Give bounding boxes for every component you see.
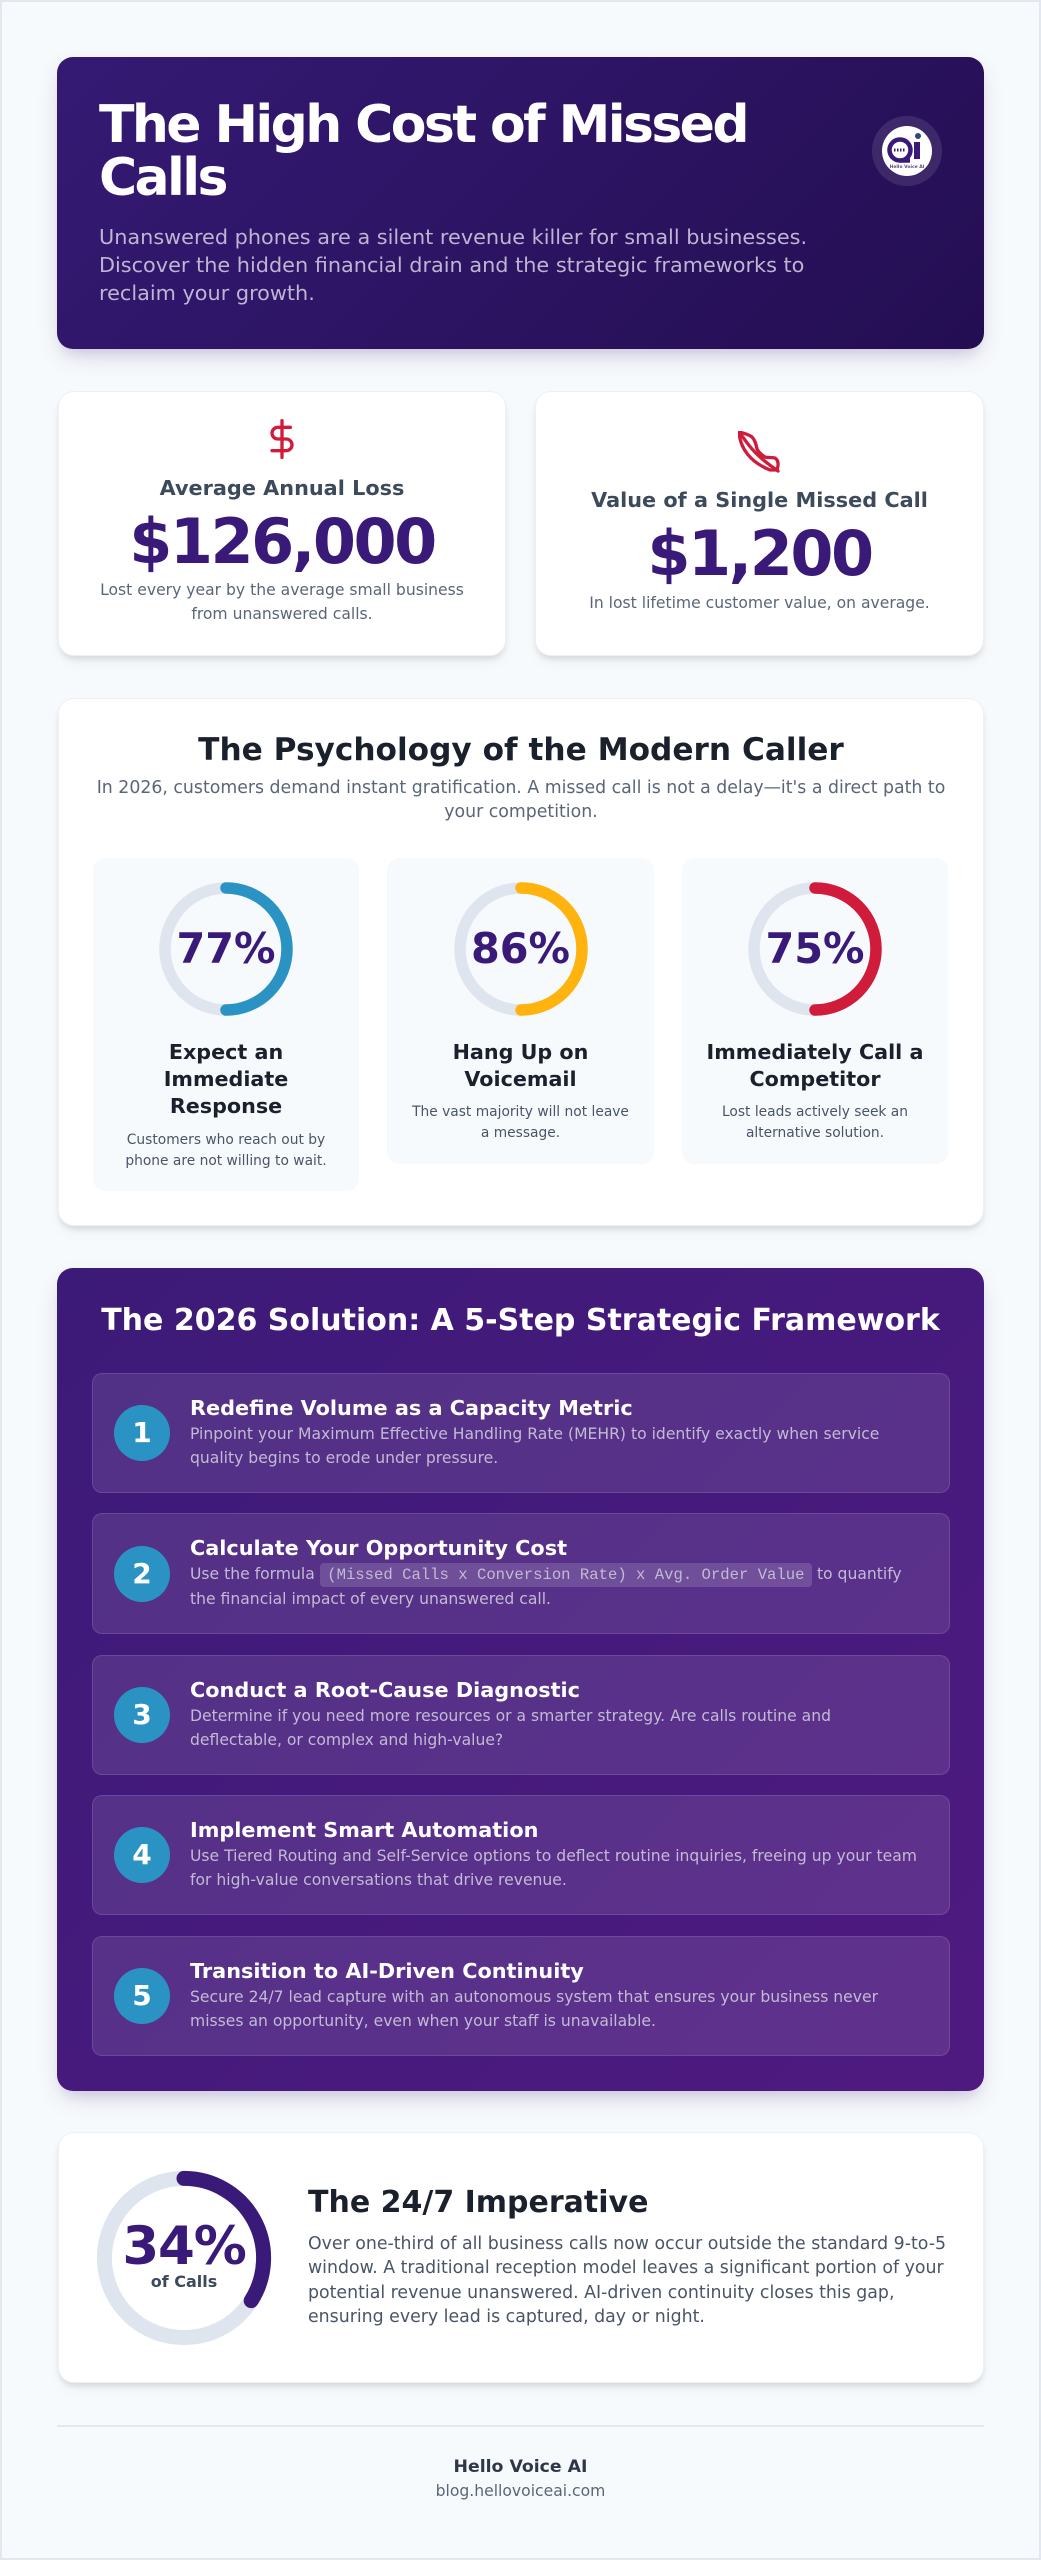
body text: window. A traditional reception model leaves a significant portion of your [308, 2258, 944, 2278]
percentage: 75% [765, 925, 865, 973]
donut chart: 75% [748, 882, 882, 1016]
title [99, 95, 747, 208]
step text: Pinpoint your Maximum Effective Handling Rate (MEHR) to identify exactly when service [190, 1424, 879, 1442]
step heading: Calculate Your Opportunity Cost [190, 1536, 567, 1560]
step text: Determine if you need more resources or a smarter strategy. Are calls routine and [190, 1706, 831, 1724]
card description [412, 1104, 629, 1141]
icon: phone [738, 431, 780, 473]
subtitle [99, 225, 807, 305]
step text: Secure 24/7 lead capture with an autonomous system that ensures your business never [190, 1988, 878, 2006]
card description: a message. [481, 1125, 560, 1141]
card heading: Hang Up on [453, 1040, 588, 1064]
step text [190, 1988, 878, 2030]
section heading: The 2026 Solution: A 5-Step Strategic Framework [101, 1303, 940, 1338]
step 4 [92, 1795, 950, 1915]
card description [125, 1132, 327, 1169]
step 1 [92, 1373, 950, 1493]
step number: 3 [132, 1698, 152, 1731]
card: 75% [682, 858, 948, 1164]
step text: Use the formula (Missed Calls x Conversion Rate) x Avg. Order Value to quantify [190, 1564, 902, 1584]
icon: logo [872, 116, 942, 186]
heading: The 24/7 Imperative [308, 2184, 648, 2220]
step text: Use Tiered Routing and Self-Service options to deflect routine inquiries, freeing up your team [190, 1846, 917, 1864]
step 3 [92, 1655, 950, 1775]
card description: alternative solution. [746, 1125, 884, 1141]
donut chart: 77% [159, 882, 293, 1016]
step heading: Transition to AI-Driven Continuity [190, 1959, 584, 1983]
card description: The vast majority will not leave [412, 1104, 629, 1120]
step text: for high-value conversations that drive revenue. [190, 1871, 567, 1889]
step text [190, 1563, 902, 1608]
panel: 5-step framework [57, 1268, 984, 2091]
section intro: your competition. [444, 802, 598, 822]
step text [190, 1706, 831, 1749]
stat description: Lost every year by the average small business [100, 581, 464, 599]
card heading: Competitor [749, 1067, 881, 1091]
stat label: Average Annual Loss [160, 476, 404, 500]
section heading: The Psychology of the Modern Caller [198, 732, 844, 768]
body text [308, 2234, 946, 2327]
subtitle: reclaim your growth. [99, 281, 315, 305]
title: The High Cost of Missed [99, 95, 747, 155]
step number [114, 1827, 170, 1883]
icon: dollar sign [270, 419, 294, 459]
card description: Lost leads actively seek an [722, 1104, 908, 1120]
footer [436, 2457, 605, 2500]
card heading: Voicemail [464, 1067, 577, 1091]
subtitle: Unanswered phones are a silent revenue killer for small businesses. [99, 225, 807, 249]
step number: 2 [132, 1557, 152, 1590]
step text: the financial impact of every unanswered call. [190, 1590, 551, 1608]
card description: phone are not willing to wait. [125, 1153, 327, 1169]
stat value: $1,200 [647, 517, 872, 590]
card: 86% [387, 858, 654, 1164]
card heading: Immediately Call a [707, 1040, 923, 1064]
panel: value of a single missed call [535, 391, 984, 656]
step number: 5 [132, 1979, 152, 2012]
step number [114, 1687, 170, 1743]
step 2 [92, 1513, 950, 1634]
body text: Over one-third of all business calls now occur outside the standard 9-to-5 [308, 2234, 946, 2254]
step text: deflectable, or complex and high-value? [190, 1731, 503, 1749]
step heading: Conduct a Root-Cause Diagnostic [190, 1678, 580, 1702]
panel: average annual loss [58, 391, 506, 656]
panel: header [57, 57, 984, 349]
step 5 [92, 1936, 950, 2056]
percentage caption: of Calls [151, 2272, 217, 2291]
donut chart: 34% [97, 2170, 272, 2345]
icon: logo: Hello Voice AI [890, 164, 925, 170]
body text: potential revenue unanswered. AI-driven continuity closes this gap, [308, 2283, 894, 2303]
stat description [100, 581, 464, 623]
card heading [453, 1040, 588, 1091]
stat description: from unanswered calls. [191, 605, 373, 623]
card heading [164, 1040, 288, 1118]
stat description: In lost lifetime customer value, on average. [589, 594, 930, 612]
step number [114, 1968, 170, 2024]
stat label: Value of a Single Missed Call [591, 488, 928, 512]
step text: misses an opportunity, even when your staff is unavailable. [190, 2012, 656, 2030]
percentage: 77% [176, 925, 276, 973]
footer url: blog.hellovoiceai.com [436, 2482, 605, 2500]
panel: psychology [58, 698, 984, 1226]
stat value: $126,000 [129, 505, 435, 578]
step text: quality begins to erode under pressure. [190, 1449, 498, 1467]
card description: Customers who reach out by [127, 1132, 325, 1148]
percentage: 34% [122, 2216, 246, 2277]
footer brand: Hello Voice AI [454, 2457, 587, 2477]
step number: 1 [132, 1416, 152, 1449]
panel: 24/7 imperative [58, 2132, 984, 2383]
title: Calls [99, 148, 226, 208]
card heading: Response [170, 1094, 282, 1118]
step text [190, 1846, 917, 1889]
step text [190, 1424, 879, 1467]
section intro [97, 778, 945, 822]
card heading [707, 1040, 923, 1091]
step heading: Implement Smart Automation [190, 1818, 538, 1842]
section intro: In 2026, customers demand instant gratification. A missed call is not a delay—it's a direct path to [97, 778, 945, 798]
step number [114, 1405, 170, 1461]
card heading: Immediate [164, 1067, 288, 1091]
body text: ensuring every lead is captured, day or night. [308, 2307, 705, 2327]
subtitle: Discover the hidden financial drain and the strategic frameworks to [99, 253, 804, 277]
card heading: Expect an [169, 1040, 283, 1064]
step number [114, 1546, 170, 1602]
donut chart: 86% [454, 882, 588, 1016]
step heading: Redefine Volume as a Capacity Metric [190, 1396, 633, 1420]
card: 77% [93, 858, 359, 1191]
card description [722, 1104, 908, 1141]
step number: 4 [132, 1838, 152, 1871]
percentage: 86% [471, 925, 570, 973]
